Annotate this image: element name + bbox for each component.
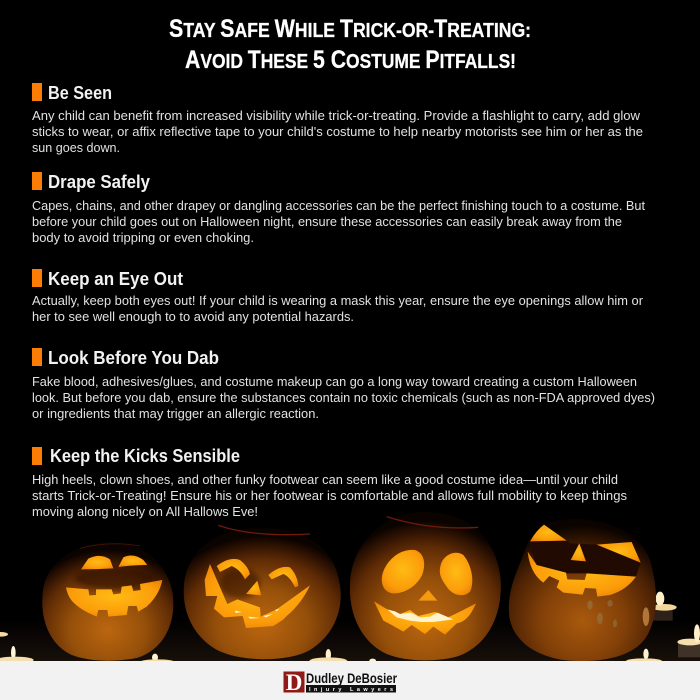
mouth <box>205 564 310 628</box>
section: Be Seen <box>32 82 643 155</box>
right eye <box>597 542 641 563</box>
nose <box>246 581 261 595</box>
photo: jack-o-lanterns and candles <box>0 512 700 665</box>
section: Keep an Eye Out: Actually, keep both eyes out! If your child is wearing a mask this year, ensure the eye openings allow him or <box>32 293 644 308</box>
section: Drape Safely: Drape Safely <box>48 171 151 192</box>
title: AVOID THESE 5 COSTUME PITFALLS! <box>185 46 516 74</box>
logo: Dudley DeBosier Injury Lawyers: D <box>286 670 302 695</box>
candles, left side <box>0 632 348 661</box>
section: Keep the Kicks Sensible: Keep the Kicks Sensible <box>50 445 240 466</box>
section: Be Seen: Any child can benefit from increased visibility while trick-or-treating. Provide a flashlight to carry, add glow <box>32 108 641 123</box>
section: Be Seen: Be Seen <box>48 82 112 103</box>
section: Keep an Eye Out <box>32 268 644 324</box>
dark face band <box>528 541 641 577</box>
nose <box>418 590 437 601</box>
right eye <box>440 553 472 595</box>
mouth <box>66 580 162 617</box>
section: Be Seen: sun goes down. <box>32 140 120 155</box>
dents and highlights <box>587 600 617 627</box>
pumpkin 4: wide smile <box>509 519 656 661</box>
left eye <box>530 525 567 541</box>
section: Keep the Kicks Sensible: moving along nicely on All Hallows Eve! <box>32 504 258 519</box>
zigzag mouth <box>374 601 476 635</box>
logo: Dudley DeBosier Injury Lawyers: Injury Lawyers <box>309 687 393 693</box>
pumpkin 2: winking grin <box>184 525 341 659</box>
section: Look Before You Dab <box>32 347 655 421</box>
mouth <box>528 552 636 597</box>
section: Drape Safely <box>32 171 645 245</box>
nose <box>571 543 586 561</box>
title <box>169 15 531 74</box>
logo: Dudley DeBosier Injury Lawyers <box>284 670 397 695</box>
left eye <box>382 550 424 593</box>
footer band <box>0 661 700 700</box>
section: Keep an Eye Out: Keep an Eye Out <box>48 268 183 289</box>
section: Drape Safely: body to avoid tripping or even choking. <box>32 230 254 245</box>
section: Keep the Kicks Sensible: starts Trick-or-Treating! Ensure his or her footwear is comfortable and allows full mobility to keep things <box>32 488 628 503</box>
section: Look Before You Dab: Fake blood, adhesives/glues, and costume makeup can go a long way toward creating a custom Halloween <box>32 374 637 389</box>
section: Look Before You Dab: Look Before You Dab <box>48 347 219 368</box>
pumpkin 3: round eyes <box>350 512 501 660</box>
section: Keep the Kicks Sensible: High heels, clown shoes, and other funky footwear can seem like a good costume idea—until your child <box>32 472 618 487</box>
title: STAY SAFE WHILE TRICK-OR-TREATING: <box>169 15 531 43</box>
section: Look Before You Dab: or ingredients that may trigger an allergic reaction. <box>32 406 319 421</box>
section: Keep an Eye Out: her to see well enough to to avoid any potential hazards. <box>32 309 354 324</box>
candles, right side <box>369 592 700 664</box>
right eye arc <box>268 567 298 587</box>
section: Drape Safely: before your child goes out on Halloween night, ensure these accessories can easily break away from the <box>32 214 622 229</box>
eyes <box>81 556 113 569</box>
logo: Dudley DeBosier Injury Lawyers: Dudley DeBosier <box>306 670 397 686</box>
pumpkin 1: square-tooth grin <box>42 543 173 661</box>
section: Keep the Kicks Sensible <box>32 445 628 519</box>
left eye arc <box>217 559 250 579</box>
section: Look Before You Dab: look. But before you dab, ensure the substances contain no toxic chemicals (such as non-FDA approved dyes) <box>32 390 655 405</box>
wooden table surface <box>0 633 700 661</box>
section: Drape Safely: Capes, chains, and other drapey or dangling accessories can be the perfect finishing touch to a costume. But <box>32 198 645 213</box>
section: Be Seen: sticks to wear, or affix reflective tape to your child's costume to help nearby motorists see him or her as the <box>32 124 643 139</box>
